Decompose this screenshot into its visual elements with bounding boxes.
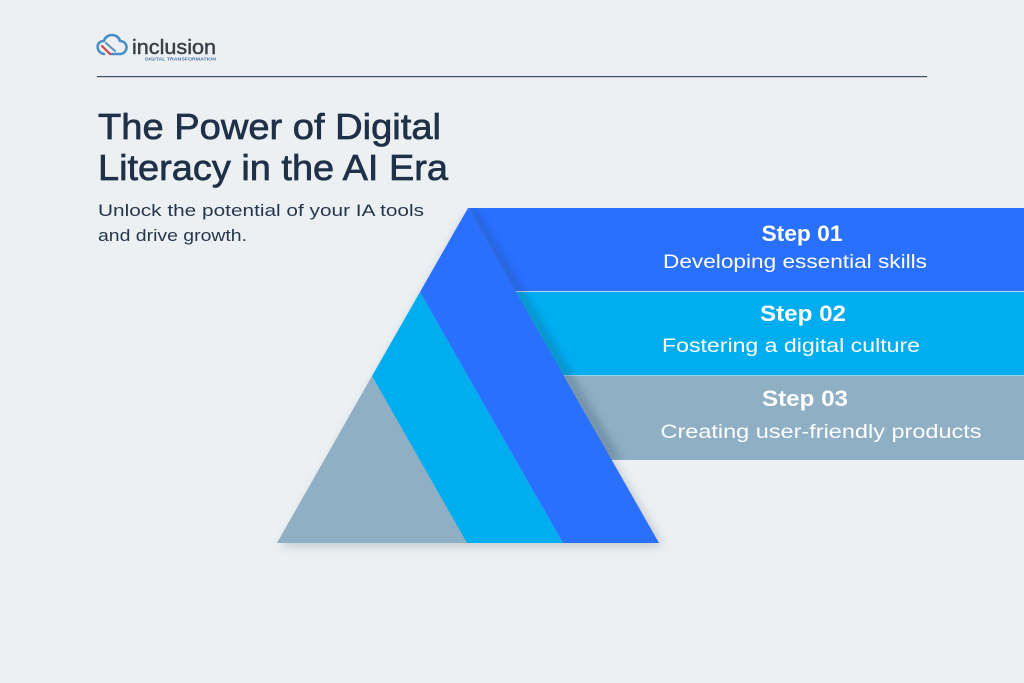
pyramid drop shadow (281, 212, 662, 546)
step 03 description: Creating user-friendly products (660, 421, 982, 443)
band: step 03 (563, 376, 1024, 460)
header rule (97, 76, 927, 77)
title: The Power of Digital (98, 106, 441, 147)
icon: cloud logo mark (98, 35, 127, 54)
step 02 heading: Step 02 (760, 301, 846, 326)
pyramid base: grey (277, 376, 467, 543)
step 03 heading: Step 03 (762, 386, 848, 411)
logo wordmark: inclusion (132, 37, 216, 59)
pyramid (277, 208, 662, 546)
band: step 02 (515, 292, 1024, 375)
step 02 description: Fostering a digital culture (662, 335, 920, 357)
subtitle: and drive growth. (98, 227, 247, 245)
band fold shadow (468, 208, 622, 460)
pyramid band: cyan (372, 292, 563, 543)
subtitle (98, 202, 424, 245)
subtitle: Unlock the potential of your IA tools (98, 202, 424, 220)
title (98, 106, 449, 188)
step 01 description: Developing essential skills (663, 251, 927, 273)
pyramid band: blue (420, 208, 659, 543)
logo (98, 35, 217, 62)
logo tagline: DIGITAL TRANSFORMATION (145, 56, 217, 62)
title: Literacy in the AI Era (98, 147, 449, 188)
band: step 01 (468, 208, 1024, 291)
step 01 heading: Step 01 (762, 221, 842, 246)
